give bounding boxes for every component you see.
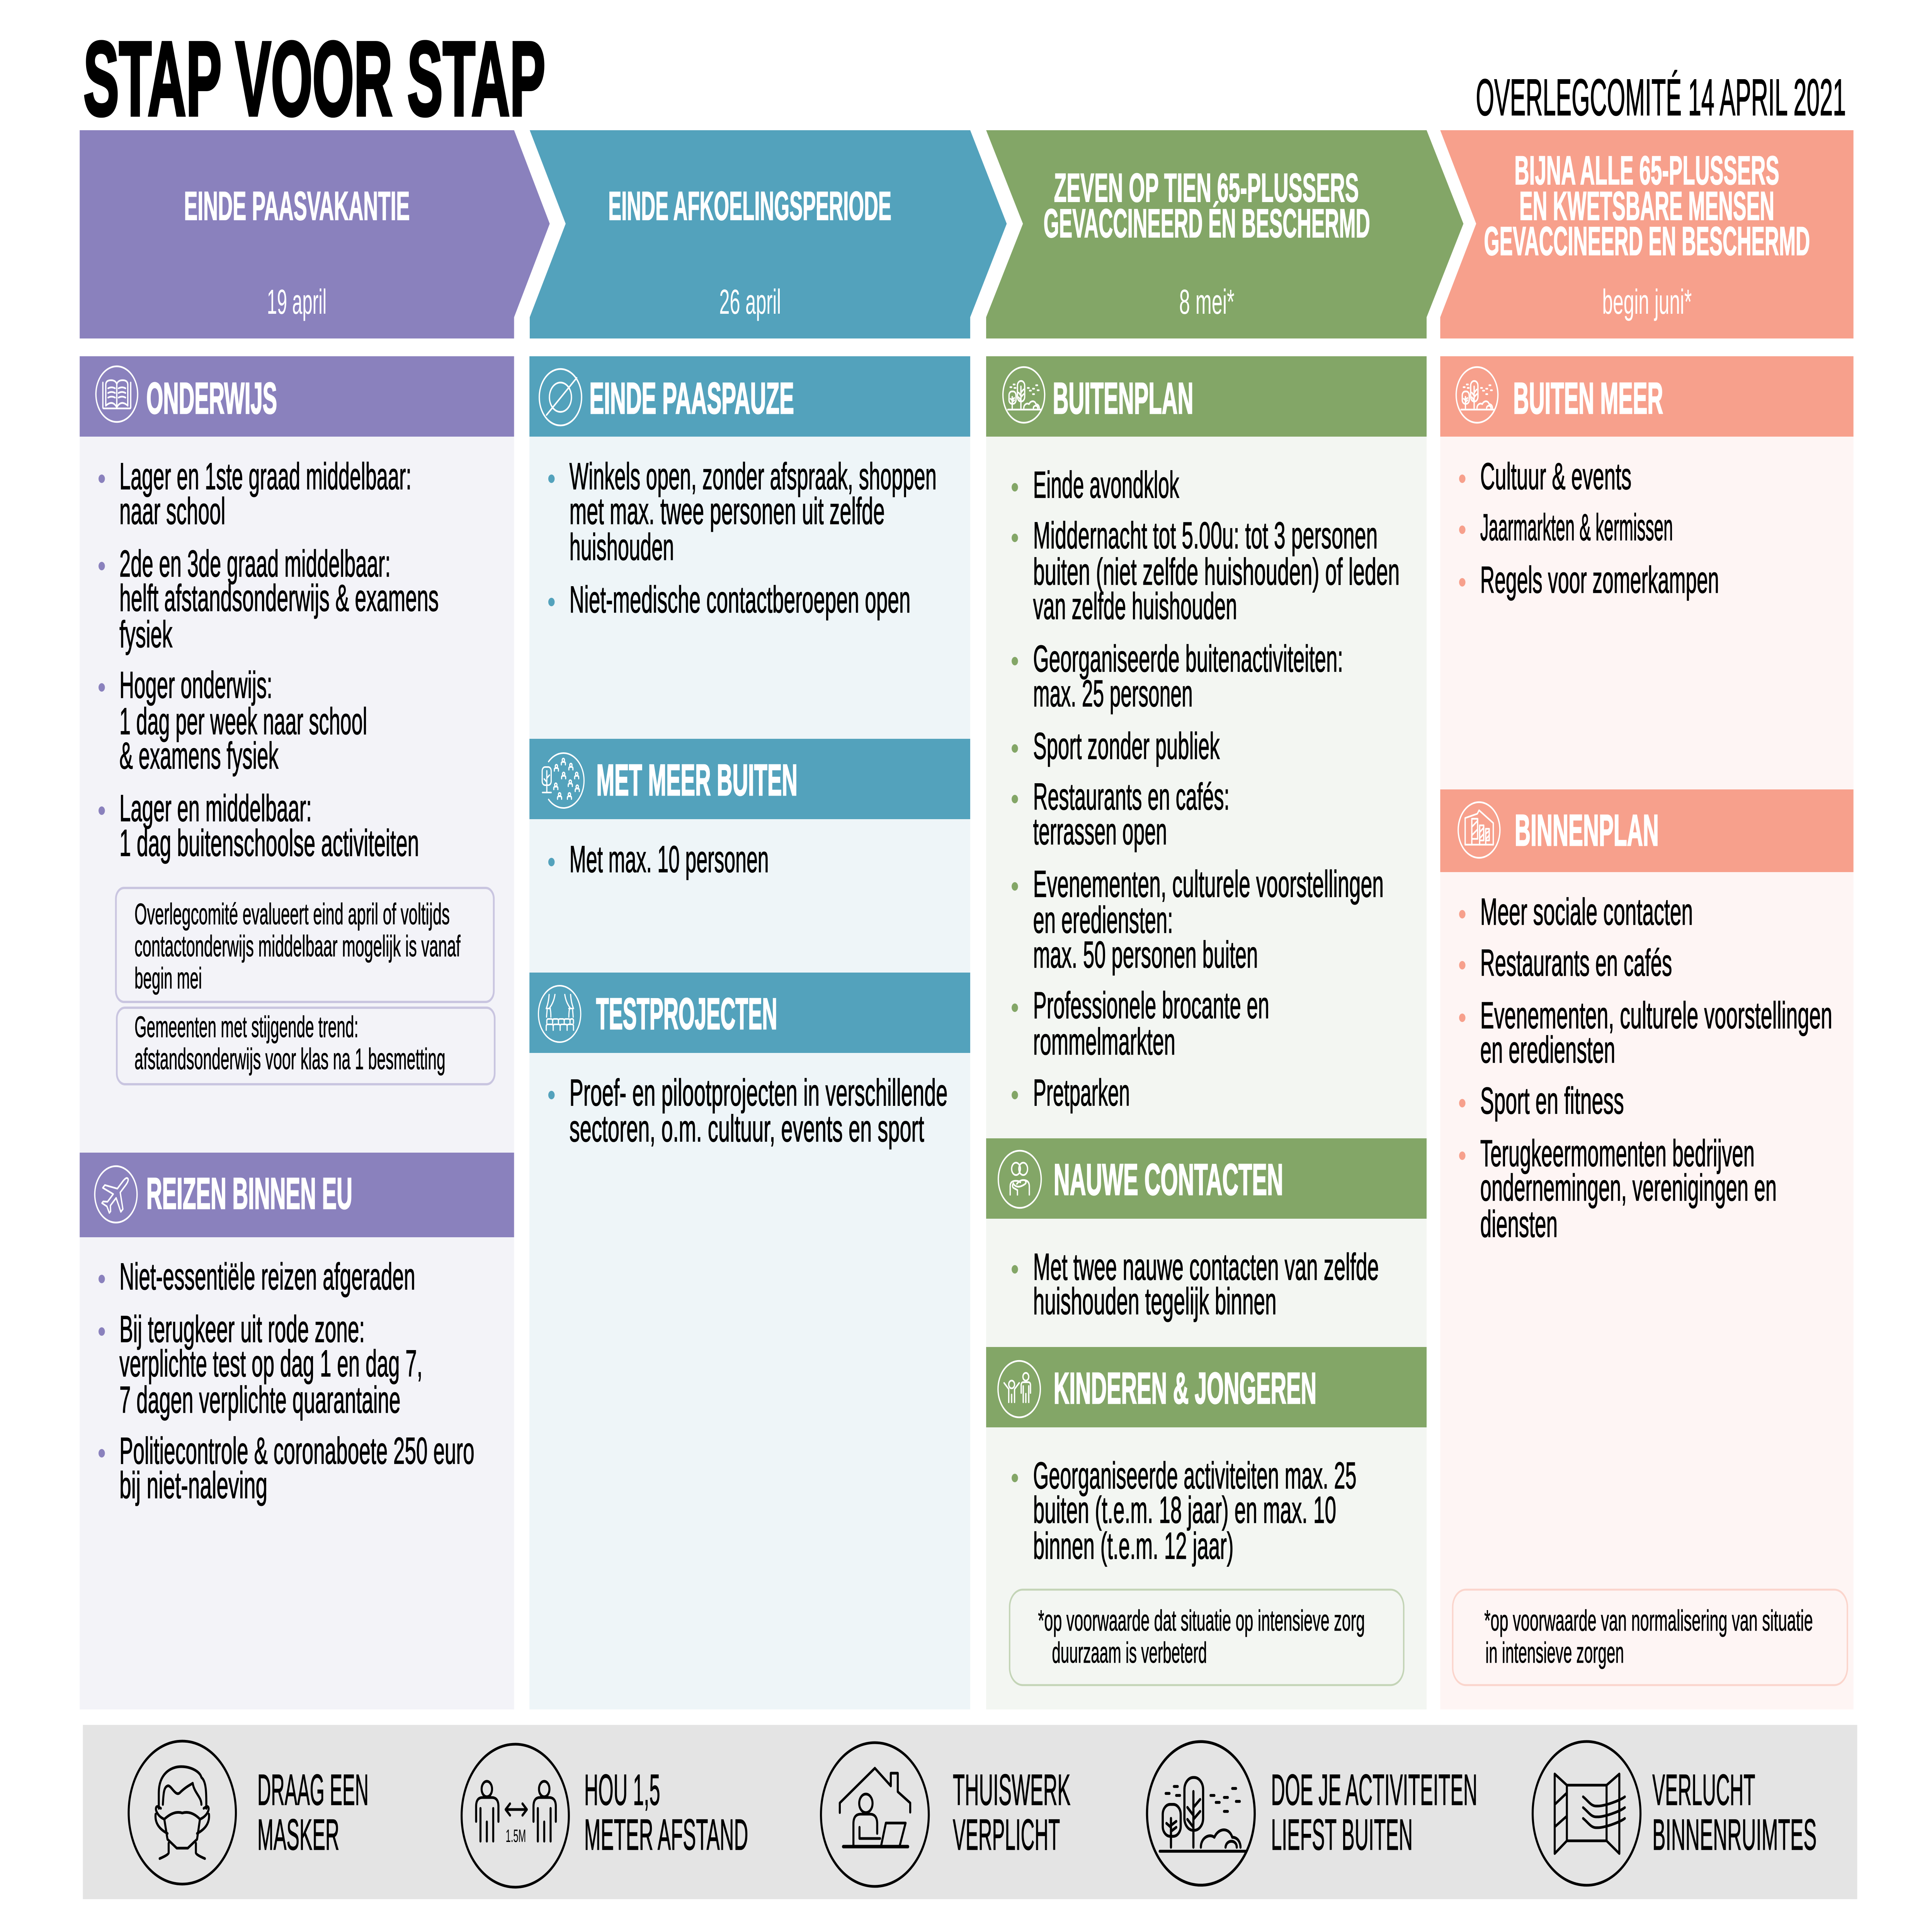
list: onderwijs: & examens fysiek: [119, 735, 279, 777]
panel: column 2: [529, 356, 970, 1709]
label: draag een masker: DRAAG EEN: [257, 1766, 369, 1815]
timeline step 4: bijna alle 65-plussers: BIJNA ALLE 65-PLUSSERS: [1514, 148, 1779, 193]
timeline step 4: bijna alle 65-plussers: [1440, 130, 1854, 338]
list: reizen: bij niet-naleving: [119, 1464, 267, 1506]
header: binnenplan: [1440, 789, 1854, 872]
list: buitenplan: max. 25 personen: [1033, 673, 1193, 714]
list: binnenplan: Restaurants en cafés: [1480, 942, 1672, 984]
list: binnenplan: diensten: [1480, 1203, 1558, 1245]
callout: evaluatie voltijds contactonderwijs: begin mei: [134, 962, 202, 995]
list: kinderen en jongeren: buiten (t.e.m. 18 jaar) en max. 10: [1033, 1489, 1336, 1531]
list: reizen: 7 dagen verplichte quarantaine: [119, 1379, 400, 1421]
header: met meer buiten: MET MEER BUITEN: [596, 756, 798, 805]
list: kinderen en jongeren: [1012, 1455, 1357, 1567]
list: reizen: Niet-essentiële reizen afgeraden: [119, 1256, 415, 1298]
list: buitenplan: Evenementen, culturele voorstellingen: [1033, 863, 1384, 905]
list: einde paaspauze: huishouden: [570, 526, 674, 568]
footnote: normalisering intensieve zorgen: [1453, 1590, 1847, 1685]
footnote: voorwaarde intensieve zorg: duurzaam is verbeterd: [1052, 1636, 1207, 1669]
label: draag een masker: [257, 1766, 369, 1859]
icon: face mask: [129, 1741, 236, 1884]
callout: evaluatie voltijds contactonderwijs: Overlegcomité evalueert eind april of voltijds: [134, 898, 450, 931]
list: onderwijs: 2de en 3de graad middelbaar:: [119, 543, 391, 585]
timeline step 4: bijna alle 65-plussers: EN KWETSBARE MENSEN: [1519, 183, 1774, 229]
callout: gemeenten met stijgende trend: [117, 1008, 495, 1084]
list: binnenplan: ondernemingen, verenigingen en: [1480, 1167, 1777, 1209]
icon: two people hugging: [998, 1151, 1041, 1208]
header: testprojecten: TESTPROJECTEN: [596, 990, 777, 1039]
header: kinderen en jongeren: KINDEREN & JONGEREN: [1054, 1364, 1316, 1413]
list: reizen: [99, 1256, 474, 1506]
list: binnenplan: Terugkeermomenten bedrijven: [1480, 1133, 1755, 1174]
label: verlucht binnenruimtes: VERLUCHT: [1652, 1766, 1755, 1815]
list: einde paaspauze: Winkels open, zonder afspraak, shoppen: [570, 456, 937, 497]
label: hou 1,5 meter afstand: [584, 1766, 748, 1859]
list: buitenplan: Middernacht tot 5.00u: tot 3 personen: [1033, 515, 1378, 556]
header: onderwijs: ONDERWIJS: [146, 374, 277, 423]
icon: outdoor activities: [1147, 1742, 1255, 1885]
callout: evaluatie voltijds contactonderwijs: contactonderwijs middelbaar mogelijk is vanaf: [134, 930, 461, 963]
header: reizen binnen eu: REIZEN BINNEN EU: [146, 1169, 352, 1218]
list: nauwe contacten: huishouden tegelijk binnen: [1033, 1281, 1277, 1322]
timeline step 3: zeven op tien 65-plussers: GEVACCINEERD ÉN BESCHERMD: [1044, 201, 1370, 246]
list: onderwijs: helft afstandsonderwijs & examens: [119, 577, 439, 619]
callout: evaluatie voltijds contactonderwijs: [116, 888, 494, 1002]
list: buitenplan: Georganiseerde buitenactiviteiten:: [1033, 638, 1343, 680]
footnote: voorwaarde intensieve zorg: *op voorwaarde dat situatie op intensieve zorg: [1038, 1604, 1365, 1637]
list: buitenplan: Restaurants en cafés:: [1033, 776, 1230, 818]
panel: column 1: [80, 356, 514, 1709]
header: nauwe contacten: NAUWE CONTACTEN: [1054, 1155, 1283, 1204]
list: buiten meer: [1459, 456, 1719, 601]
timeline step 2: einde afkoelingsperiode: [530, 130, 1007, 338]
footnote: voorwaarde intensieve zorg: [1010, 1590, 1404, 1685]
list: buitenplan: Professionele brocante en: [1033, 985, 1269, 1026]
header: testprojecten: [529, 973, 970, 1053]
list: onderwijs: 1 dag per week naar school: [119, 701, 367, 742]
header: buitenplan: [986, 356, 1427, 437]
icon: trees outdoors: [1456, 367, 1498, 423]
list: testprojecten: Proef- en pilootprojecten in verschillende: [570, 1072, 947, 1114]
list: binnenplan: Meer sociale contacten: [1480, 891, 1693, 933]
label: doe je activiteiten liefst buiten: DOE JE ACTIVITEITEN: [1271, 1766, 1477, 1815]
panel: column 3: [986, 356, 1427, 1709]
icon: distance 1.5 metres: 1.5M: [506, 1826, 526, 1846]
header: kinderen en jongeren: [986, 1347, 1427, 1427]
list: onderwijs: Hoger onderwijs:: [119, 664, 272, 706]
list: buitenplan: Einde avondklok: [1033, 464, 1179, 506]
list: reizen: verplichte test op dag 1 en dag 7,: [119, 1343, 422, 1384]
list: binnenplan: [1459, 891, 1832, 1245]
timeline step 1: einde paasvakantie: EINDE PAASVAKANTIE: [184, 183, 410, 229]
label: thuiswerk verplicht: THUISWERK: [953, 1766, 1070, 1815]
icon: work from home: [821, 1743, 929, 1886]
timeline step 3: zeven op tien 65-plussers: 8 mei*: [1179, 282, 1235, 321]
label: draag een masker: MASKER: [257, 1811, 339, 1859]
list: buitenplan: en erediensten:: [1033, 899, 1173, 941]
list: binnenplan: Sport en fitness: [1480, 1080, 1624, 1122]
list: onderwijs: Lager en middelbaar:: [119, 787, 312, 829]
label: verlucht binnenruimtes: BINNENRUIMTES: [1652, 1811, 1817, 1859]
label: verlucht binnenruimtes: [1652, 1766, 1817, 1859]
list: binnenplan: en erediensten: [1480, 1029, 1615, 1071]
list: buiten meer: Regels voor zomerkampen: [1480, 559, 1719, 601]
list: buitenplan: [1012, 464, 1400, 1114]
label: hou 1,5 meter afstand: HOU 1,5: [584, 1766, 660, 1815]
icon: child and adult: [998, 1361, 1040, 1417]
label: doe je activiteiten liefst buiten: [1271, 1766, 1477, 1859]
list: reizen: Politiecontrole & coronaboete 250 euro: [119, 1430, 474, 1472]
header: buiten meer: [1440, 356, 1854, 437]
panel: footer measures: [83, 1725, 1857, 1899]
list: buitenplan: Sport zonder publiek: [1033, 725, 1220, 767]
header: einde paaspauze: EINDE PAASPAUZE: [589, 374, 794, 423]
header: buitenplan: BUITENPLAN: [1053, 374, 1193, 423]
list: onderwijs: Lager en 1ste graad middelbaar:: [119, 456, 412, 497]
header: met meer buiten: [529, 739, 970, 819]
icon: airplane: [95, 1166, 137, 1223]
callout: gemeenten met stijgende trend: Gemeenten met stijgende trend:: [134, 1010, 359, 1044]
list: onderwijs: naar school: [119, 490, 225, 532]
timeline step 2: einde afkoelingsperiode: 26 april: [719, 282, 781, 321]
callout: gemeenten met stijgende trend: afstandsonderwijs voor klas na 1 besmetting: [134, 1043, 446, 1076]
label: doe je activiteiten liefst buiten: LIEFST BUITEN: [1271, 1811, 1413, 1859]
header: onderwijs: [80, 356, 514, 437]
icon: theatre curtains and seats: [538, 986, 581, 1042]
list: buitenplan: terrassen open: [1033, 811, 1167, 852]
footnote: normalisering intensieve zorgen: in intensieve zorgen: [1485, 1636, 1624, 1669]
footnote: normalisering intensieve zorgen: *op voorwaarde van normalisering van situatie: [1484, 1604, 1813, 1637]
list: buitenplan: Pretparken: [1033, 1072, 1130, 1114]
timeline step 3: zeven op tien 65-plussers: [986, 130, 1463, 338]
list: nauwe contacten: Met twee nauwe contacten van zelfde: [1033, 1246, 1379, 1288]
icon: trees outdoors: [1003, 367, 1045, 423]
header: nauwe contacten: [986, 1138, 1427, 1219]
list: buiten meer: Jaarmarkten & kermissen: [1480, 506, 1673, 548]
timeline step 2: einde afkoelingsperiode: EINDE AFKOELINGSPERIODE: [608, 183, 891, 229]
header: binnenplan: BINNENPLAN: [1515, 806, 1659, 855]
timeline step 3: zeven op tien 65-plussers: ZEVEN OP TIEN 65-PLUSSERS: [1054, 165, 1359, 211]
list: kinderen en jongeren: Georganiseerde activiteiten max. 25: [1033, 1455, 1357, 1497]
list: einde paaspauze: Niet-medische contactberoepen open: [570, 579, 910, 621]
list: buitenplan: rommelmarkten: [1033, 1021, 1175, 1063]
list: met meer buiten: [548, 838, 769, 880]
header: reizen binnen eu: [80, 1153, 514, 1237]
list: einde paaspauze: [548, 456, 937, 621]
icon: book: [96, 366, 138, 422]
timeline step 1: einde paasvakantie: [80, 130, 550, 338]
list: onderwijs: fysiek: [119, 614, 172, 655]
icon: people around tree: [542, 753, 584, 808]
icon: ventilated window: [1533, 1742, 1641, 1885]
list: kinderen en jongeren: binnen (t.e.m. 12 jaar): [1033, 1525, 1234, 1567]
list: testprojecten: sectoren, o.m. cultuur, events en sport: [570, 1108, 924, 1150]
timeline step 4: bijna alle 65-plussers: begin juni*: [1602, 282, 1692, 321]
icon: building: [1458, 802, 1500, 858]
list: buiten meer: Cultuur & events: [1480, 456, 1631, 497]
title: STAP VOOR STAP: [83, 20, 545, 138]
label: hou 1,5 meter afstand: METER AFSTAND: [584, 1811, 748, 1859]
list: buitenplan: van zelfde huishouden: [1033, 585, 1237, 627]
list: nauwe contacten: [1012, 1246, 1379, 1322]
list: einde paaspauze: met max. twee personen uit zelfde: [570, 490, 885, 532]
list: testprojecten: [548, 1072, 947, 1150]
list: reizen: Bij terugkeer uit rode zone:: [119, 1308, 365, 1350]
header: einde paaspauze: [529, 356, 970, 437]
list: met meer buiten: Met max. 10 personen: [570, 838, 769, 880]
list: buitenplan: buiten (niet zelfde huishouden) of leden: [1033, 551, 1400, 593]
label: thuiswerk verplicht: VERPLICHT: [953, 1811, 1060, 1859]
timeline step 1: einde paasvakantie: 19 april: [267, 282, 327, 321]
icon: distance 1.5 metres: [462, 1744, 569, 1887]
panel: column 4: [1440, 356, 1854, 1709]
label: thuiswerk verplicht: [953, 1766, 1070, 1859]
list: onderwijs: 1 dag buitenschoolse activiteiten: [119, 822, 419, 864]
list: onderwijs: [99, 456, 439, 864]
icon: crossed circle: [539, 369, 582, 425]
list: buitenplan: max. 50 personen buiten: [1033, 934, 1258, 976]
header: buiten meer: BUITEN MEER: [1513, 374, 1663, 423]
